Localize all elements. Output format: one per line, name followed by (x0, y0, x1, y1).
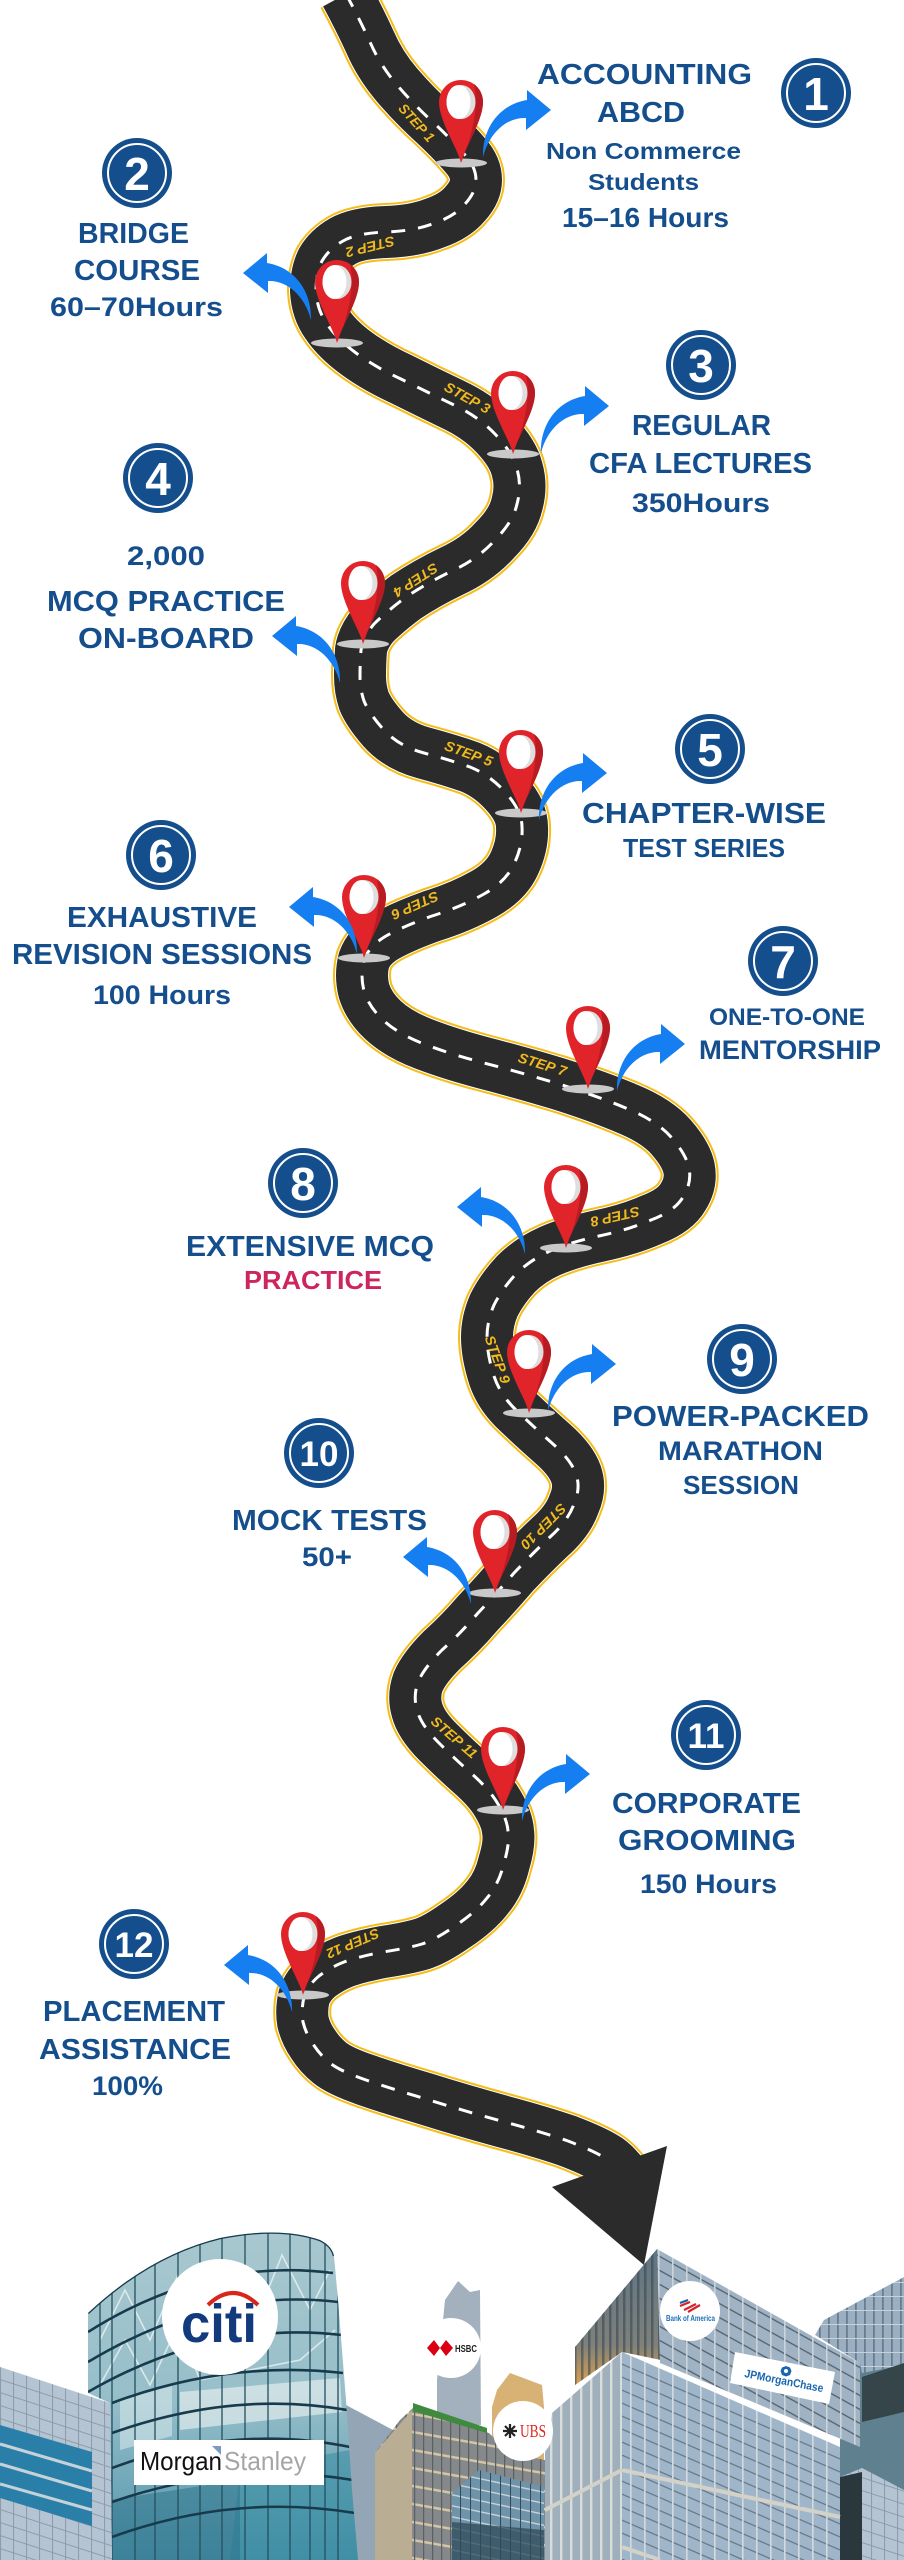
building: UBS tower (492, 2373, 544, 2500)
step labels on the road: STEP 4 (390, 560, 441, 601)
text 6: 100 Hours (93, 980, 231, 1010)
road arrowhead (552, 2146, 667, 2265)
panel: step 11 (477, 1700, 801, 1899)
building: rear of tower (346, 2405, 393, 2560)
badge 3: 3 (688, 340, 714, 392)
text 2: BRIDGE (78, 218, 189, 250)
arrow 5 (539, 753, 607, 820)
text 1: 15–16 Hours (562, 202, 729, 233)
arrow 3 (541, 386, 609, 453)
badge 6: 6 (148, 830, 174, 882)
arrow 2 (243, 253, 311, 320)
step labels on the road: STEP 5 (442, 737, 495, 769)
text 3: CFA LECTURES (589, 448, 812, 480)
pin 8 (540, 1165, 592, 1252)
logo: Citi: citi (181, 2294, 257, 2354)
text 9: SESSION (683, 1470, 799, 1500)
text 1 (537, 59, 752, 233)
text 7: MENTORSHIP (699, 1035, 881, 1065)
badge 9 (707, 1324, 777, 1394)
badge 10: 10 (300, 1435, 338, 1474)
panel: step 2 (50, 138, 363, 348)
pin 7 (562, 1006, 614, 1094)
text 4: ON-BOARD (78, 623, 254, 655)
text 6: REVISION SESSIONS (12, 939, 312, 971)
text 3: REGULAR (632, 410, 771, 442)
logo: HSBC: HSBC (455, 2344, 477, 2355)
badge 7: 7 (770, 936, 796, 988)
text 11 (612, 1788, 801, 1899)
text 8: PRACTICE (244, 1265, 382, 1295)
step labels on the road: STEP 10 (517, 1500, 570, 1553)
logo: Morgan Stanley (134, 2440, 324, 2485)
text 11: 150 Hours (640, 1869, 777, 1899)
panel: step 12 (39, 1909, 329, 2101)
panel: step 10 (232, 1418, 521, 1604)
text 12: ASSISTANCE (39, 2034, 231, 2066)
step labels on the road (324, 100, 641, 1962)
badge 1 (781, 58, 851, 128)
text 11: CORPORATE (612, 1788, 801, 1820)
panel: step 8 (186, 1148, 592, 1295)
text 6: EXHAUSTIVE (67, 902, 257, 934)
text 2: COURSE (74, 255, 200, 287)
badge 4 (123, 443, 193, 513)
text 9: POWER-PACKED (612, 1401, 869, 1433)
step labels on the road: STEP 2 (344, 233, 396, 261)
building: mid tan block (375, 2408, 545, 2560)
building: far right dark gap (862, 2363, 904, 2422)
building: lower glass block (452, 2470, 544, 2560)
badge 8 (268, 1148, 338, 1218)
text 4: 2,000 (127, 541, 205, 571)
pin 4 (337, 561, 389, 648)
building: glass tower (85, 2225, 365, 2560)
badge 4: 4 (145, 453, 171, 505)
logo: Bank of America (660, 2281, 720, 2341)
text 12 (39, 1996, 231, 2101)
text 1: ABCD (597, 97, 685, 129)
badge 11 (671, 1700, 741, 1770)
panel: step 7 (562, 926, 881, 1094)
badge 7 (748, 926, 818, 996)
text 5: CHAPTER-WISE (582, 798, 826, 830)
text 10: MOCK TESTS (232, 1505, 427, 1537)
building: main upper left face (575, 2249, 661, 2385)
pin 9 (503, 1330, 555, 1418)
text 2 (50, 218, 223, 322)
text 9 (612, 1401, 869, 1500)
badge 11: 11 (688, 1717, 724, 1756)
text 10: 50+ (302, 1542, 352, 1572)
badge 9: 9 (729, 1334, 755, 1386)
step labels on the road: STEP 1 (395, 100, 438, 145)
badge 10 (284, 1418, 354, 1488)
pin 12 (277, 1912, 329, 2000)
badge 8: 8 (290, 1158, 316, 1210)
arrow 8 (457, 1187, 525, 1254)
text 3 (589, 410, 812, 518)
arrow 11 (522, 1754, 590, 1821)
building: balconies (375, 2410, 412, 2560)
panel: step 3 (487, 330, 812, 518)
text 9: MARATHON (658, 1436, 823, 1466)
building: left block windows (0, 2425, 92, 2526)
arrow 9 (548, 1344, 616, 1411)
arrow 4 (272, 616, 340, 683)
logo: UBS (493, 2401, 553, 2461)
text 6 (12, 902, 312, 1010)
text 1: Students (588, 169, 699, 195)
building: far right backing (840, 2360, 904, 2560)
building: main upper right face (657, 2249, 860, 2447)
arrow 12 (224, 1945, 292, 2012)
step labels on the road: STEP 7 (516, 1049, 570, 1080)
step labels on the road: STEP 6 (389, 888, 441, 923)
arrow 7 (617, 1024, 685, 1091)
text 12: 100% (92, 2071, 163, 2101)
step labels on the road: STEP 3 (442, 379, 493, 417)
arrow 10 (403, 1537, 471, 1604)
badge 5 (675, 714, 745, 784)
building: main lower right face (622, 2352, 840, 2560)
pin 10 (469, 1510, 521, 1598)
building: far right lower (840, 2468, 904, 2560)
badge 5: 5 (697, 724, 723, 776)
text 1: Non Commerce (546, 138, 741, 164)
badge 6 (126, 820, 196, 890)
logo: JPMorgan Chase (730, 2352, 835, 2404)
text 5 (582, 798, 826, 863)
text 4 (47, 541, 285, 655)
badge 12 (99, 1909, 169, 1979)
building: main lower left face (545, 2352, 622, 2560)
logo: Bank of America: Bank of America (666, 2313, 715, 2323)
arrow 6 (289, 887, 357, 954)
logo: JPMorgan Chase: JPMorganChase (743, 2368, 824, 2395)
text 2: 60–70Hours (50, 292, 223, 322)
logo: UBS: UBS (520, 2421, 546, 2441)
logo: Citi (162, 2259, 278, 2375)
pin 6 (338, 875, 390, 962)
text 1: ACCOUNTING (537, 59, 752, 91)
building: left block (0, 2367, 112, 2560)
panel: step 5 (495, 714, 826, 863)
pin 11 (477, 1727, 529, 1814)
step labels on the road: STEP 8 (589, 1203, 641, 1230)
pin 5 (495, 730, 547, 818)
road (302, 0, 690, 2185)
panel: step 1 (435, 58, 851, 233)
building: lower glass shadow (452, 2522, 544, 2560)
text 11: GROOMING (618, 1825, 796, 1857)
text 7: ONE-TO-ONE (709, 1004, 865, 1031)
logo: Morgan Stanley: Stanley (224, 2446, 306, 2476)
building: floor bands (545, 2470, 840, 2560)
pin 1 (435, 80, 487, 168)
badge 3 (666, 330, 736, 400)
logo: Morgan Stanley: Morgan (140, 2446, 222, 2476)
panel: step 9 (503, 1324, 869, 1500)
text 3: 350Hours (632, 488, 770, 518)
text 7 (699, 1004, 881, 1065)
pin 2 (311, 260, 363, 348)
text 12: PLACEMENT (43, 1996, 225, 2028)
text 5: TEST SERIES (623, 833, 785, 863)
building: HSBC tower (437, 2281, 481, 2425)
step labels on the road: STEP 9 (482, 1333, 514, 1386)
step labels on the road: STEP 12 (324, 1925, 382, 1962)
text 4: MCQ PRACTICE (47, 586, 285, 618)
building: green roof (413, 2403, 487, 2433)
building: far right upper (815, 2277, 904, 2373)
badge 1: 1 (803, 68, 829, 120)
panel: step 4 (47, 443, 389, 683)
arrow 1 (483, 90, 551, 157)
skyline (0, 2225, 904, 2560)
panel: step 6 (12, 820, 390, 1010)
building: far right dark strip (840, 2472, 862, 2560)
text 8: EXTENSIVE MCQ (186, 1231, 434, 1263)
text 8 (186, 1231, 434, 1295)
text 10 (232, 1505, 427, 1572)
logo: HSBC (421, 2318, 481, 2378)
step labels on the road: STEP 11 (428, 1713, 481, 1762)
badge 2 (102, 138, 172, 208)
badge 12: 12 (115, 1926, 153, 1965)
pin 3 (487, 371, 539, 458)
badge 2: 2 (124, 148, 150, 200)
